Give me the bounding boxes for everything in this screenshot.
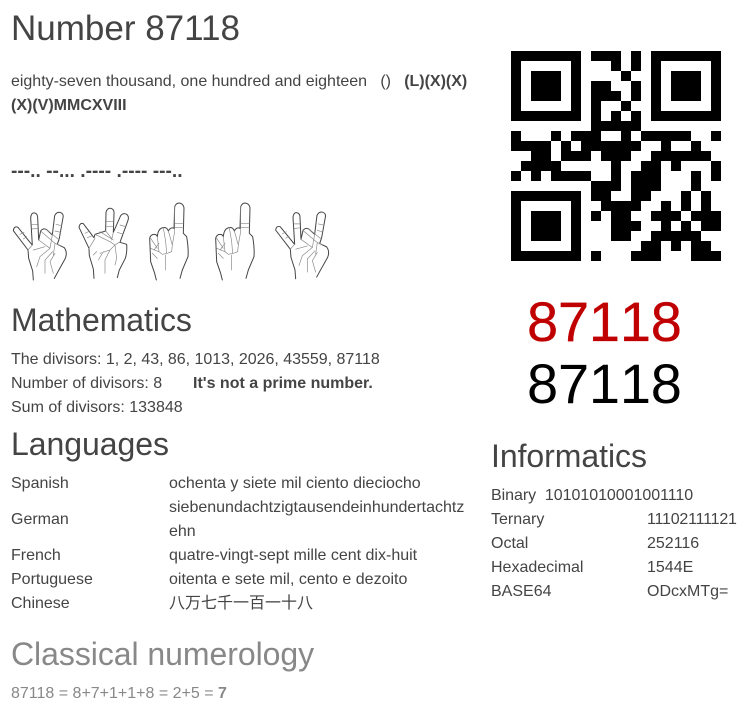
big number: red: 87118 [527,290,682,353]
panel: informatics table: 252116 [647,535,699,552]
panel: informatics table [491,487,737,600]
panel: informatics table: Octal [491,535,528,552]
heading: Mathematics: Mathematics [11,302,192,338]
panel: languages table: French [11,547,61,564]
number of divisors: Number of divisors: 8 [11,375,162,392]
heading: Informatics: Informatics [491,438,647,474]
icon: QR code [511,51,721,261]
prime statement: It's not a prime number. [193,375,373,392]
hand: eight [276,212,329,279]
hand: one [150,203,188,280]
panel: languages table [11,475,464,612]
panel: languages table: Spanish [11,475,69,492]
text block: number in words and roman numeral [11,73,467,114]
panel: languages table: siebenundachtzigtausendeinhundertachtz [169,499,464,516]
text block: number in words and roman numeral: (X)(V)MMCXVIII [11,97,127,114]
panel: mathematics facts [11,351,380,416]
hand: eight [13,212,66,280]
panel: informatics table: BASE64 [491,583,551,600]
panel: languages table: ehn [169,523,196,540]
icon: sign language hands [12,202,330,280]
panel: languages table: ochenta y siete mil ciento dieciocho [169,475,421,492]
panel: informatics table: Binary 10101010001001110 [491,487,693,504]
panel: languages table: Portuguese [11,571,93,588]
panel: languages table: 八万七千一百一十八 [169,595,313,612]
divisors: The divisors: 1, 2, 43, 86, 1013, 2026, 43559, 87118 [11,351,380,368]
text block: number in words and roman numeral: eighty-seven thousand, one hundred and eighteen () (L)(X)(X) [11,73,467,90]
panel: informatics table: ODcxMTg= [647,583,728,600]
panel: languages table: quatre-vingt-sept mille cent dix-huit [169,547,417,564]
panel: informatics table: Hexadecimal [491,559,583,576]
morse code: ---.. --... .---- .---- ---.. [11,161,183,182]
panel: languages table: German [11,511,69,528]
panel: informatics table: 11102111121 [647,511,737,528]
big number: black: 87118 [527,352,682,415]
panel: languages table: Chinese [11,595,70,612]
hand: one [216,203,254,280]
title: Number 87118 [11,9,240,48]
hand: seven [79,208,128,278]
sum of divisors: Sum of divisors: 133848 [11,399,183,416]
heading: Classical numerology: Classical numerology [11,636,314,672]
panel: informatics table: Ternary [491,511,544,528]
panel: languages table: oitenta e sete mil, cento e dezoito [169,571,407,588]
panel: informatics table: 1544E [647,559,693,576]
heading: Languages: Languages [11,426,169,462]
numerology calculation: 87118 = 8+7+1+1+8 = 2+5 = 7 [11,685,227,702]
